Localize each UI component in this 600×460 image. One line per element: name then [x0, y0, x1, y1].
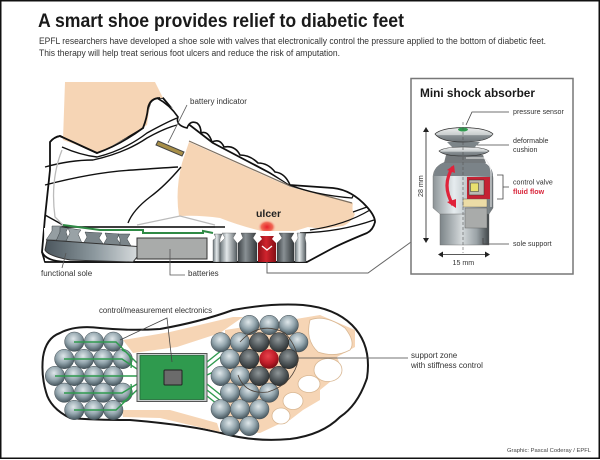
foot in shoe	[178, 142, 355, 231]
label: batteries: batteries	[188, 269, 219, 278]
laces	[157, 98, 290, 185]
label: control valve, fluid flow	[497, 175, 553, 199]
sole bottom	[42, 252, 307, 262]
battery indicator device	[156, 141, 184, 156]
label: pressure sensor	[466, 108, 564, 125]
collar and seam lines	[45, 118, 225, 227]
toe cap lines	[290, 185, 374, 233]
sole cavity	[44, 228, 307, 261]
title: A smart shoe provides relief to diabetic feet	[38, 10, 404, 32]
intro text: EPFL researchers have developed a shoe sole with valves that electronically control the pressure applied to the bottom of diabetic feet.	[39, 36, 546, 46]
label: control valve, fluid flow: fluid flow	[513, 188, 545, 196]
lower cushion disc	[439, 147, 489, 156]
red valve	[258, 236, 276, 262]
dimension: 15 mm: 15 mm	[452, 259, 474, 267]
fluid flow arrow	[447, 167, 453, 205]
foot top edge	[189, 141, 352, 203]
rear cushions	[46, 226, 131, 246]
label: batteries	[170, 249, 219, 278]
forefoot silhouette	[225, 315, 355, 433]
shoe upper	[42, 98, 375, 262]
dimension: 15 mm	[438, 252, 490, 267]
intro text	[39, 36, 546, 58]
toes	[272, 318, 352, 424]
absorber drawing	[433, 122, 493, 253]
panel heading: Mini shock absorber	[420, 88, 536, 100]
grey inner heel lines	[54, 150, 215, 225]
shoe illustration	[42, 82, 375, 262]
label: functional sole: functional sole	[41, 269, 93, 278]
collar outline	[50, 98, 160, 153]
top disc	[435, 128, 493, 142]
sole outline	[42, 305, 368, 440]
label: sole support: sole support	[513, 240, 552, 248]
label: support zone	[298, 351, 483, 370]
sphere: ulcer zone	[259, 349, 279, 369]
credit: Graphic: Pascal Coderay / EPFL	[507, 448, 592, 454]
leg	[63, 82, 163, 153]
label: pressure sensor: pressure sensor	[513, 108, 564, 116]
label: sole support	[483, 238, 552, 248]
label: control valve, fluid flow: control valve	[513, 178, 553, 186]
lower cylinder	[440, 213, 489, 245]
functional sole	[45, 240, 145, 262]
ulcer label: ulcer	[256, 208, 281, 220]
spheres: forefoot	[211, 315, 308, 436]
heel traces	[55, 342, 137, 410]
dimension: 28 mm: 28 mm	[417, 175, 425, 197]
connector to detail panel	[267, 242, 411, 273]
label: deformable cushion	[477, 137, 549, 154]
zone outline	[238, 328, 298, 392]
spheres: active dark ring	[240, 333, 298, 386]
spheres: heel	[45, 332, 132, 420]
sole top view	[42, 305, 368, 440]
intro text: This therapy will help treat serious foot ulcers and reduce the risk of amputation.	[39, 48, 340, 58]
circuit traces	[63, 225, 213, 233]
ulcer glow	[258, 220, 276, 234]
label: support zone: support zone	[411, 351, 458, 360]
label: battery indicator	[168, 97, 247, 143]
label: deformable cushion: deformable	[513, 137, 549, 145]
panel: mini shock absorber	[411, 78, 573, 274]
main body	[433, 162, 493, 214]
foot arch strips	[122, 317, 243, 432]
dimension: 28 mm	[417, 127, 429, 243]
front cushions	[213, 233, 306, 262]
label: functional sole	[41, 253, 93, 278]
label: deformable cushion: cushion	[513, 146, 538, 154]
necks	[444, 155, 486, 163]
cutaway	[467, 177, 490, 199]
label: control/measurement electronics	[99, 306, 212, 362]
batteries	[137, 238, 207, 259]
electronics board	[137, 354, 207, 402]
label: battery indicator: battery indicator	[190, 97, 247, 106]
label: control/measurement electronics: control/measurement electronics	[99, 306, 212, 315]
label: support zone: with stiffness control	[410, 361, 483, 370]
forefoot traces	[207, 350, 222, 408]
